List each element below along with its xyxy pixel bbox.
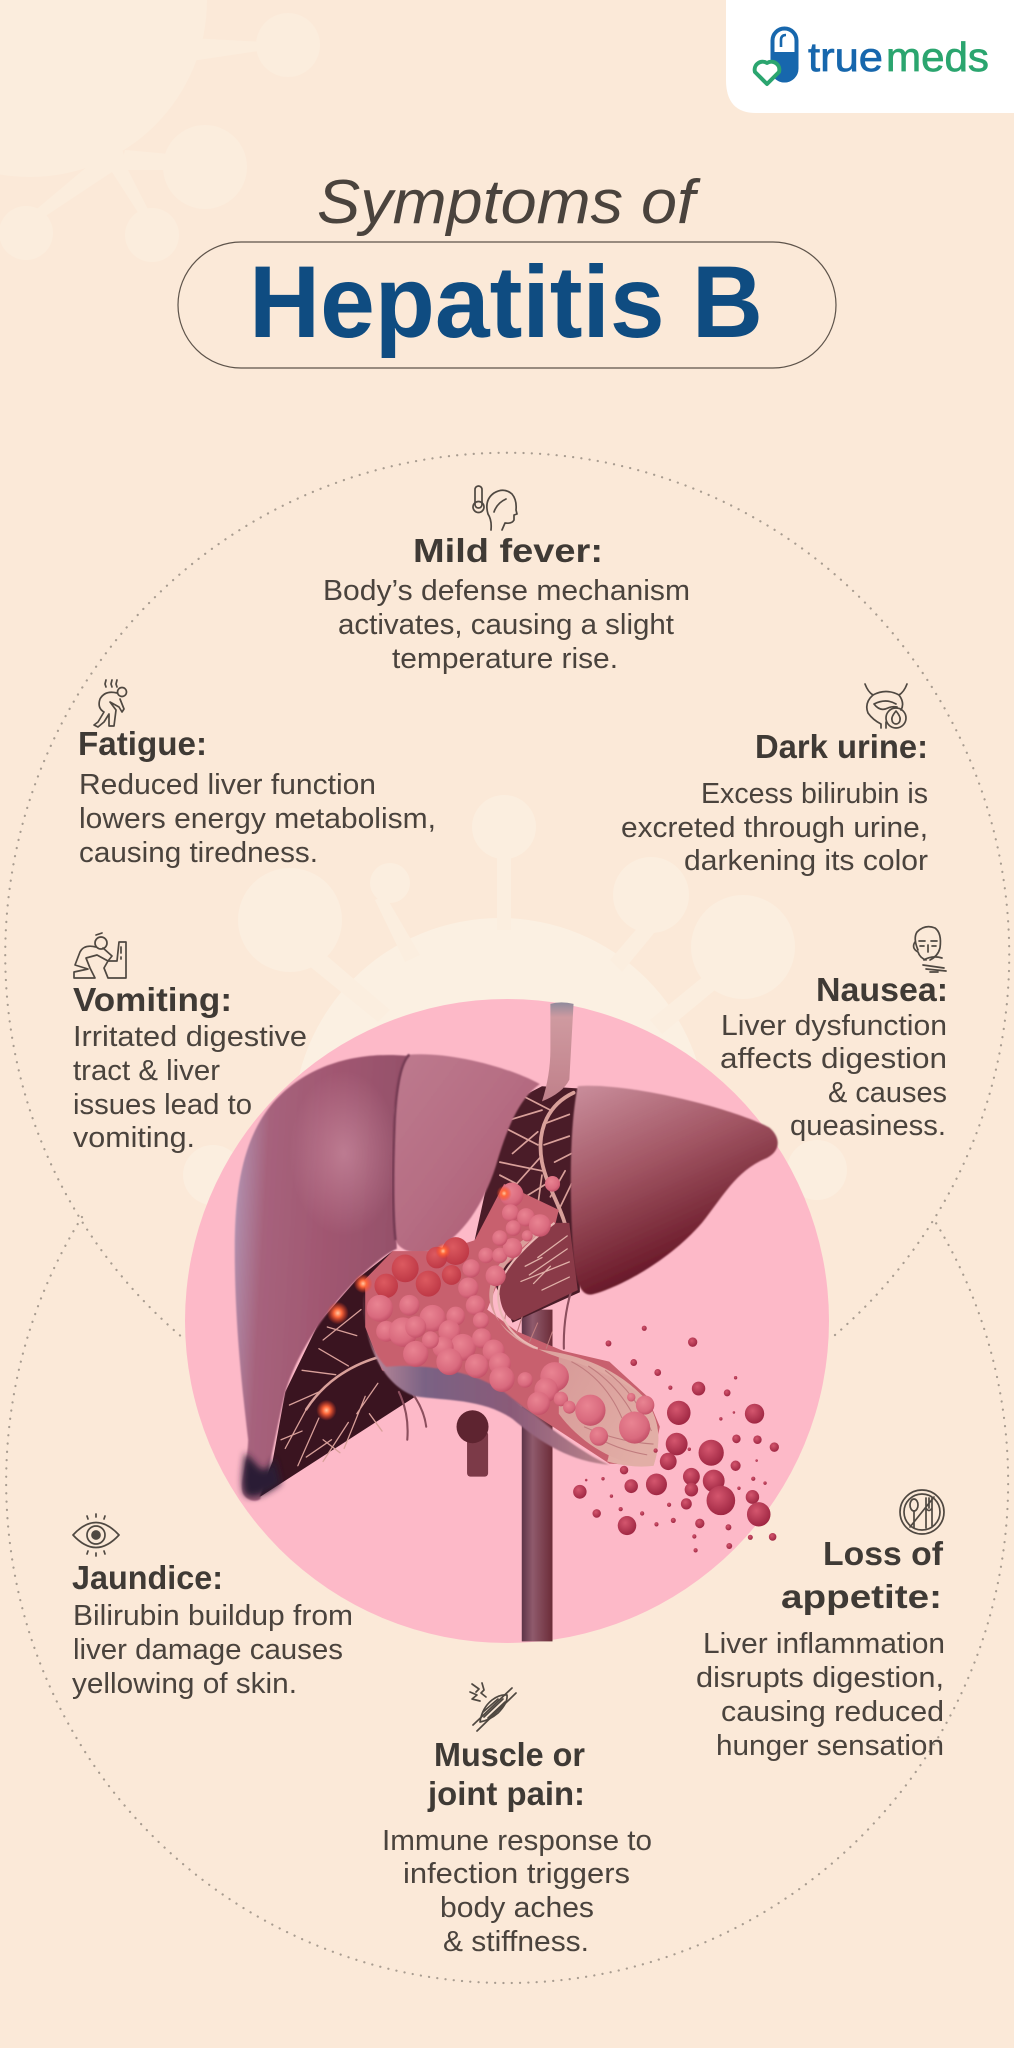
heading: Muscle or xyxy=(434,1736,585,1773)
dark vein cavity: lower left xyxy=(258,1251,416,1498)
vessel: upper xyxy=(542,1002,574,1101)
icon: eye xyxy=(73,1514,119,1556)
heading: Loss of xyxy=(823,1535,944,1572)
ribbon: inner surface xyxy=(489,1223,658,1467)
text block: infection triggers xyxy=(403,1858,630,1890)
text block: Liver dysfunction xyxy=(721,1010,947,1042)
left lobe highlight xyxy=(289,1071,399,1236)
text block xyxy=(73,1021,307,1154)
text block: Liver inflammation xyxy=(703,1628,945,1660)
symptom: Jaundice xyxy=(72,1514,353,1700)
right liver lobe xyxy=(571,1086,778,1295)
text block: tract & liver xyxy=(73,1055,221,1087)
heading: Mild fever: xyxy=(413,532,603,569)
text block: causing tiredness. xyxy=(79,837,318,869)
symptom: Vomiting xyxy=(73,933,307,1154)
text block: Bilirubin buildup from xyxy=(73,1600,353,1632)
symptom: Nausea xyxy=(720,927,948,1142)
text block: body aches xyxy=(440,1892,594,1924)
veins xyxy=(281,1093,574,1466)
text block: yellowing of skin. xyxy=(72,1668,297,1700)
text block: hunger sensation xyxy=(716,1730,944,1762)
heading xyxy=(781,1535,944,1615)
symptom: Loss of appetite xyxy=(696,1490,945,1762)
pebbles: in cavity xyxy=(374,1237,469,1298)
title: Symptoms of: Symptoms of xyxy=(317,168,701,237)
text block: disrupts digestion, xyxy=(696,1662,944,1694)
cavity fill xyxy=(365,1184,660,1466)
logo wordmark: meds xyxy=(886,34,989,80)
text block xyxy=(72,1600,353,1700)
icon: capsule with heart xyxy=(755,28,798,84)
left lobe tip shadow xyxy=(242,1453,281,1497)
text block: & stiffness. xyxy=(443,1926,589,1958)
text block xyxy=(382,1825,652,1958)
text block xyxy=(323,575,690,675)
logo wordmark xyxy=(808,34,989,80)
text block xyxy=(621,778,929,877)
icon: tired figure xyxy=(94,680,126,727)
text block: Excess bilirubin is xyxy=(701,778,928,810)
icon: no cutlery xyxy=(900,1490,944,1534)
pink circle xyxy=(185,999,829,1643)
text block: activates, causing a slight xyxy=(338,609,674,641)
dark vein cavity: centre xyxy=(475,1086,580,1323)
decorative virus: top left xyxy=(0,0,320,262)
middle liver lobe xyxy=(393,1054,540,1252)
knob xyxy=(457,1410,489,1477)
flap edge xyxy=(498,1223,555,1349)
seam between lobes xyxy=(393,1055,409,1240)
text block: Reduced liver function xyxy=(79,769,376,801)
symptom: Muscle or joint pain xyxy=(382,1683,652,1958)
text block: liver damage causes xyxy=(73,1634,343,1666)
text block: Body’s defense mechanism xyxy=(323,575,690,607)
icon: bladder with drop xyxy=(865,684,907,728)
pebbles: pink cluster xyxy=(367,1176,654,1446)
logo panel xyxy=(726,0,1014,113)
red glow spots xyxy=(316,1186,512,1421)
vessel: lower vertical xyxy=(522,1310,552,1641)
text block: darkening its color xyxy=(684,845,929,877)
heading: Nausea: xyxy=(816,971,948,1008)
text block: affects digestion xyxy=(720,1043,947,1075)
text block xyxy=(79,769,436,869)
heading: appetite: xyxy=(781,1578,942,1615)
text block: excreted through urine, xyxy=(621,812,928,844)
scattered pebbles xyxy=(573,1326,779,1552)
text block: Immune response to xyxy=(382,1825,652,1857)
symptom: Dark urine xyxy=(621,684,929,877)
ribbon: inner ridges xyxy=(504,1301,654,1455)
icon: head with thermometer xyxy=(473,486,517,530)
heading: Dark urine: xyxy=(755,728,928,765)
text block: temperature rise. xyxy=(392,643,618,675)
heading: Fatigue: xyxy=(78,725,207,762)
heading: Vomiting: xyxy=(73,981,232,1018)
title pill: Hepatitis B: Hepatitis B xyxy=(249,245,763,359)
ribbon: inner dark vein flap xyxy=(499,1223,578,1320)
text block xyxy=(696,1628,945,1762)
dotted circle: upper arc xyxy=(5,453,1009,1338)
text block xyxy=(720,1010,947,1142)
dotted circle: lower arc xyxy=(6,1217,1008,1983)
heading xyxy=(427,1736,585,1812)
text block: & causes xyxy=(828,1077,947,1109)
icon: muscle with pain bolts xyxy=(470,1683,516,1731)
liver illustration xyxy=(235,1002,779,1641)
ribbon: lower basin xyxy=(559,1357,658,1466)
text block: vomiting. xyxy=(73,1122,195,1154)
text block: causing reduced xyxy=(721,1696,944,1728)
heading: Jaundice: xyxy=(72,1559,223,1596)
symptom: Mild fever xyxy=(323,486,690,675)
hanging veins xyxy=(399,1284,574,1440)
text block: issues lead to xyxy=(73,1089,252,1121)
text block: queasiness. xyxy=(790,1110,946,1142)
symptom: Fatigue xyxy=(78,680,436,869)
logo wordmark: true xyxy=(808,34,883,80)
heading: joint pain: xyxy=(427,1775,585,1812)
icon: person at toilet xyxy=(74,933,126,978)
text block: lowers energy metabolism, xyxy=(79,803,436,835)
icon: face with hand xyxy=(914,927,946,972)
left liver lobe xyxy=(235,1055,407,1501)
text block: Irritated digestive xyxy=(73,1021,307,1053)
ribbon: outer underside xyxy=(364,1292,609,1465)
decorative virus: behind liver xyxy=(183,795,847,1332)
flap veins xyxy=(521,1236,569,1290)
